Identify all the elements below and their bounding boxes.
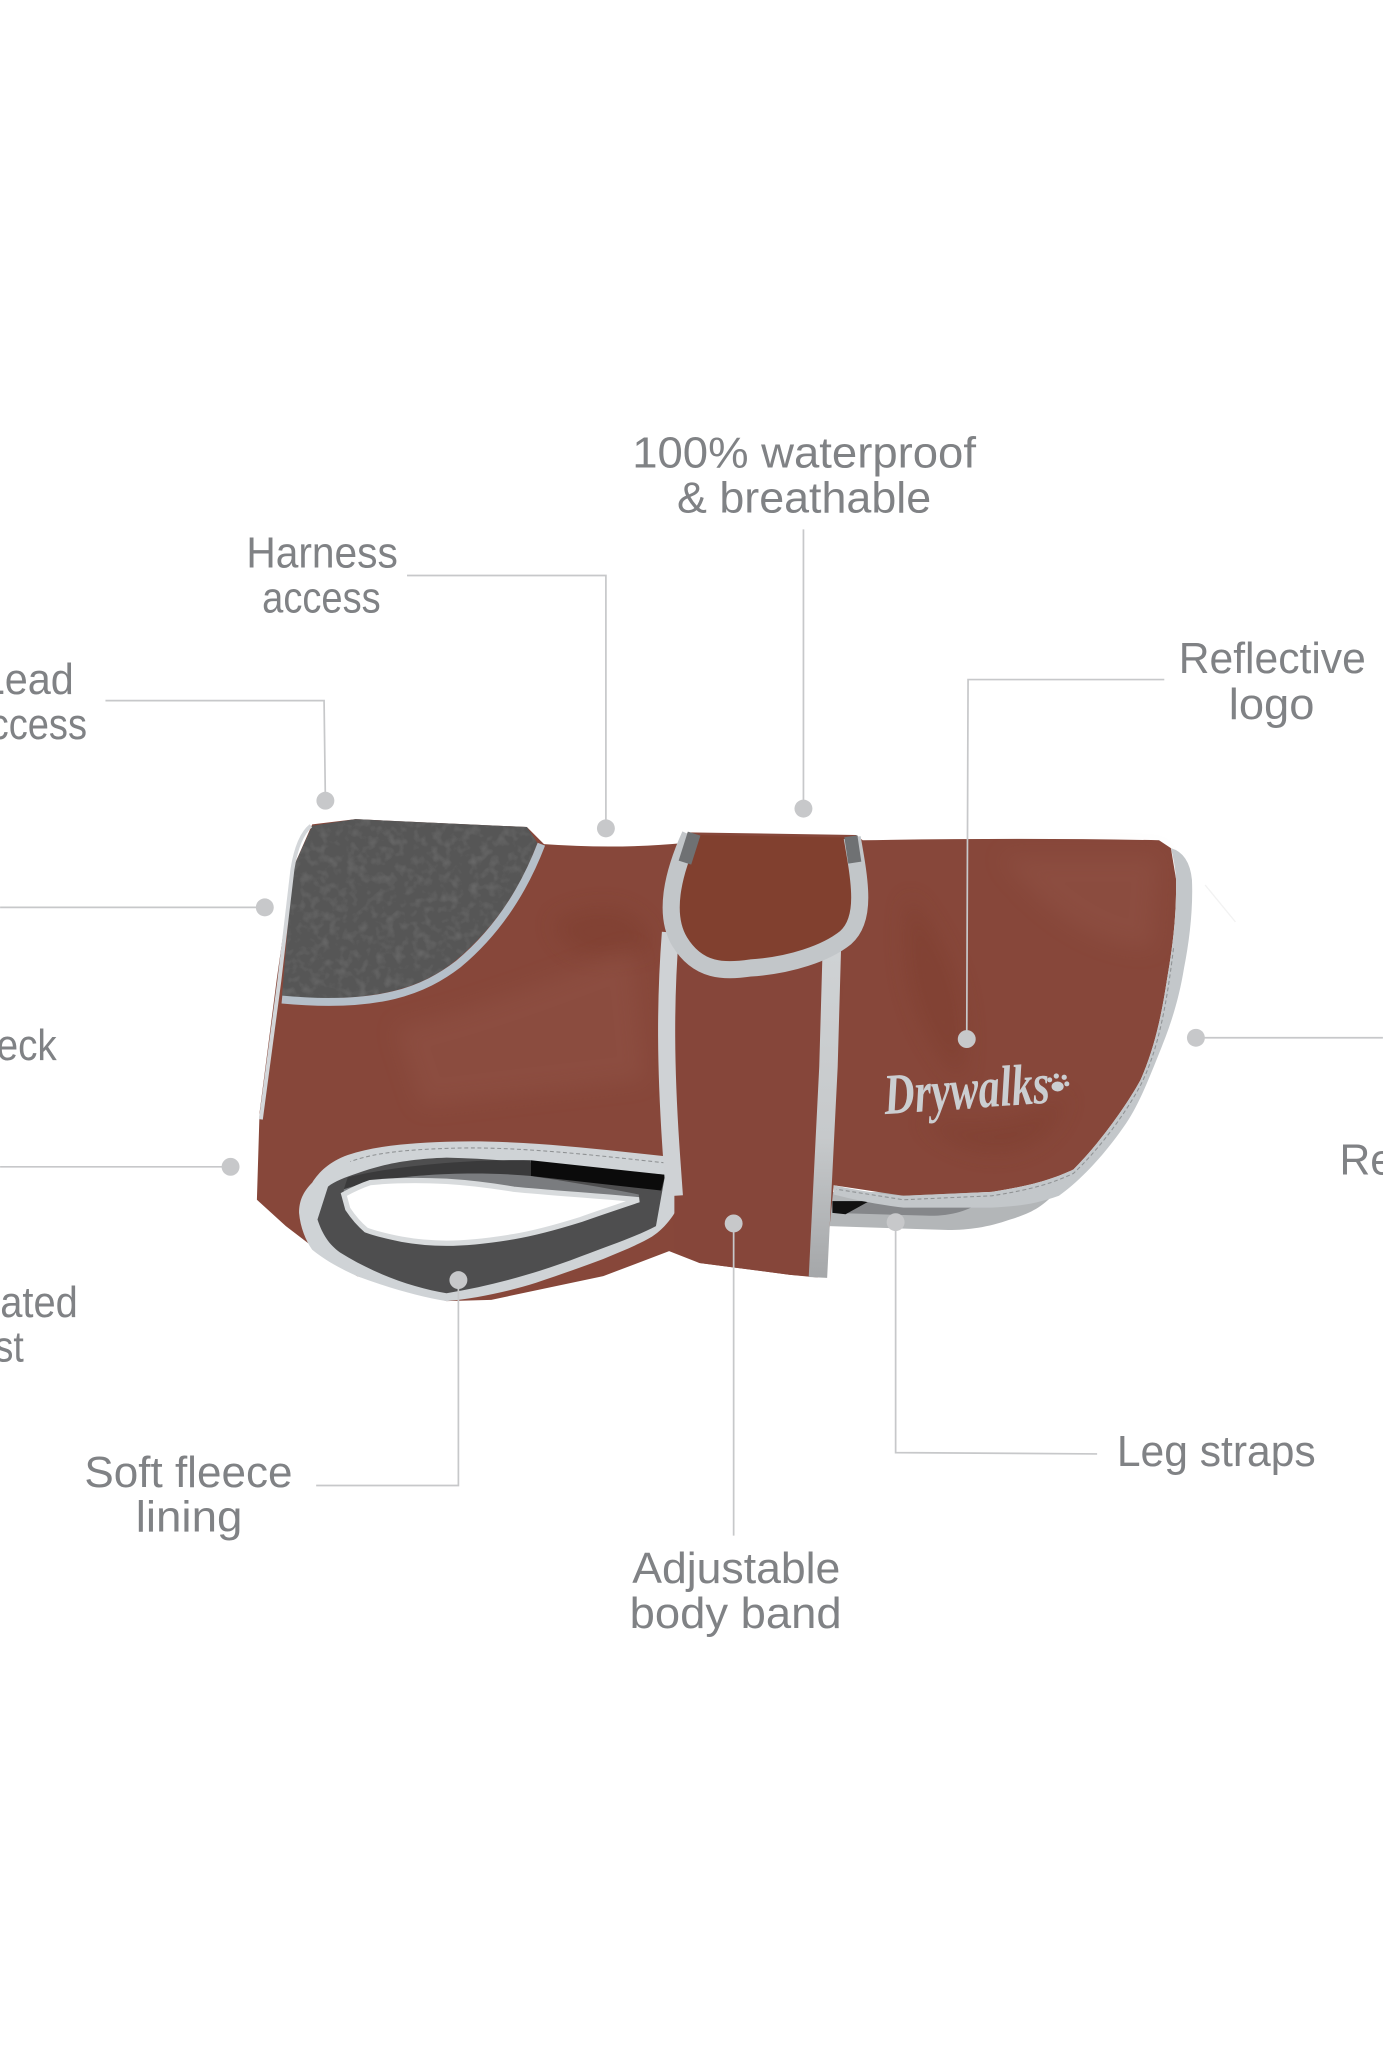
tail trim stitching xyxy=(836,948,1174,1200)
callout: harness access: access xyxy=(262,574,381,622)
collar trim xyxy=(282,844,541,1002)
dog coat xyxy=(257,819,1235,1301)
callout: elasticated chest xyxy=(0,1158,240,1372)
callout: soft fleece lining xyxy=(84,1271,467,1542)
fleece lining xyxy=(317,1158,665,1293)
body band xyxy=(667,834,860,1277)
logo: Drywalks xyxy=(881,1051,1052,1127)
coat body xyxy=(257,819,1176,1301)
faint tail edge xyxy=(1205,885,1235,922)
fleece collar xyxy=(282,819,537,998)
callout: adjustable body band: body band xyxy=(630,1590,842,1638)
fabric folds xyxy=(553,896,1067,1152)
callout: soft fleece lining: Soft fleece xyxy=(84,1449,292,1497)
leg strap xyxy=(830,1192,1055,1230)
callout: lead access xyxy=(0,656,334,810)
body strap xyxy=(531,1160,665,1191)
callout: leg straps: Leg straps xyxy=(1117,1428,1316,1476)
callout: reflective logo: Reflective xyxy=(1179,635,1366,683)
callout: soft fleece lining: lining xyxy=(136,1494,242,1542)
callout: reflective logo xyxy=(958,635,1366,1048)
callout: adjustable body band xyxy=(630,1215,842,1638)
band right trim xyxy=(818,928,832,1277)
leg trim stitching xyxy=(350,1148,665,1163)
callout: reflective trim xyxy=(1187,1029,1383,1185)
band panel xyxy=(672,922,831,1277)
icon: paw xyxy=(1047,1073,1069,1092)
callout: harness access xyxy=(246,530,615,837)
neck edge trim xyxy=(261,826,311,1119)
callout: harness access: Harness xyxy=(246,530,398,578)
band left trim xyxy=(667,932,674,1196)
callout: adjustable body band: Adjustable xyxy=(632,1545,840,1593)
callout: leg straps xyxy=(887,1213,1316,1476)
leg opening xyxy=(299,1141,684,1301)
callout: 100% waterproof: & breathable xyxy=(677,474,931,522)
callout: reflective logo: logo xyxy=(1229,681,1314,729)
flap trim shadow xyxy=(685,834,855,863)
callout: 100% waterproof xyxy=(632,430,977,818)
flap trim xyxy=(671,835,860,970)
tail trim xyxy=(834,848,1192,1208)
band flap xyxy=(671,835,860,970)
callout: neck xyxy=(0,898,274,1070)
callout: 100% waterproof: 100% waterproof xyxy=(632,430,977,478)
leg opening trim xyxy=(299,1141,684,1301)
leg hole xyxy=(344,1180,639,1243)
